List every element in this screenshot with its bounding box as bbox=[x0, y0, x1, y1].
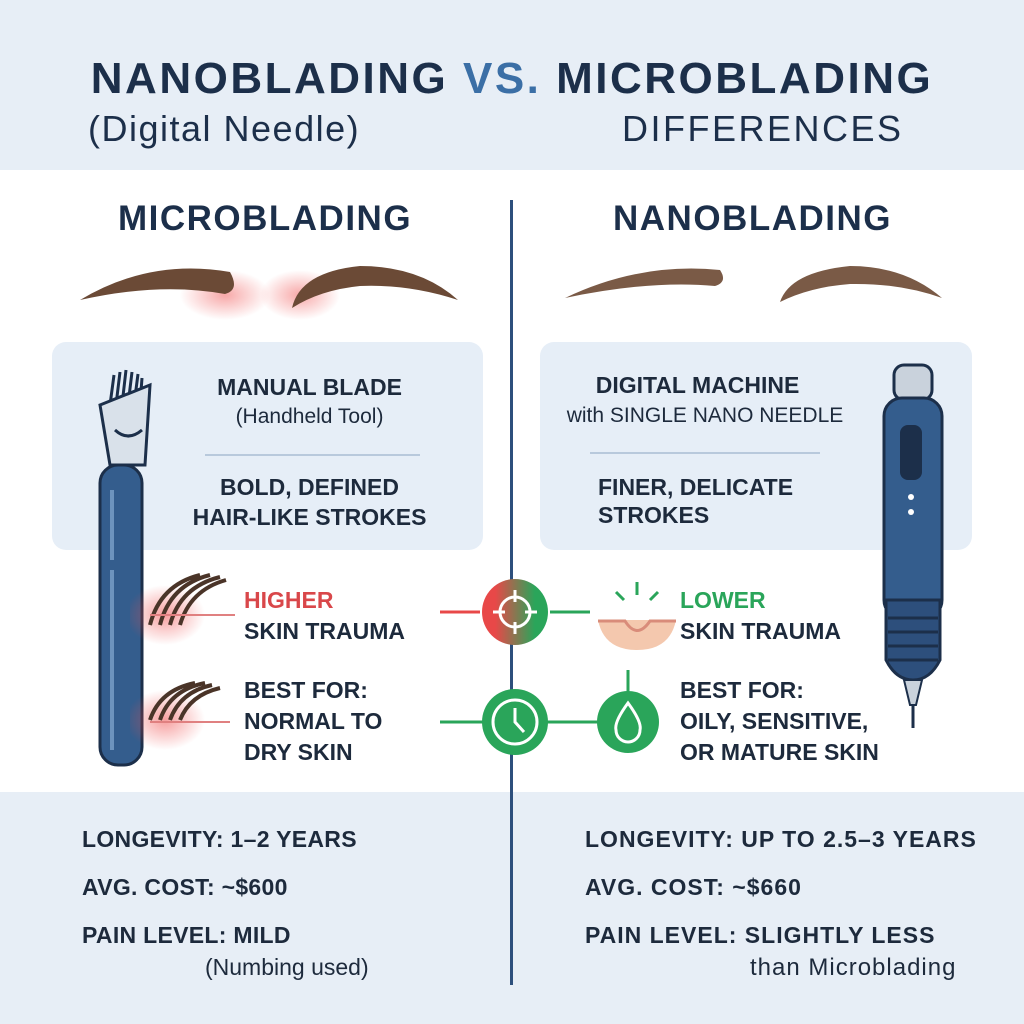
text: lower skin trauma: SKIN TRAUMA bbox=[680, 618, 841, 644]
icon: hair strokes with redness bbox=[130, 573, 235, 748]
footer: nanoblading stats bbox=[585, 826, 977, 948]
footer: microblading stats: LONGEVITY: 1–2 YEARS bbox=[82, 826, 357, 852]
panel: microblading tool box: HAIR-LIKE STROKES bbox=[193, 504, 426, 530]
panel: microblading tool box: (Handheld Tool) bbox=[236, 405, 383, 428]
subtitle left: (Digital Needle) bbox=[88, 108, 360, 149]
text: best for normal: DRY SKIN bbox=[244, 739, 353, 765]
text: best for oily bbox=[680, 677, 879, 765]
text: higher skin trauma: HIGHER bbox=[244, 587, 333, 613]
text: higher skin trauma: SKIN TRAUMA bbox=[244, 618, 405, 644]
panel: nanoblading tool box: FINER, DELICATE bbox=[598, 474, 793, 500]
icon: manual blade bbox=[98, 370, 152, 766]
text: best for oily: BEST FOR: bbox=[680, 677, 804, 703]
text: best for oily: OR MATURE SKIN bbox=[680, 739, 879, 765]
title: NANOBLADING VS. MICROBLADING bbox=[91, 54, 933, 103]
header band bbox=[0, 0, 1024, 170]
text: than Microblading bbox=[750, 954, 956, 981]
footer: microblading stats bbox=[82, 826, 357, 948]
heading: nanoblading: NANOBLADING bbox=[613, 199, 892, 238]
text: lower skin trauma bbox=[680, 587, 841, 644]
text: higher skin trauma bbox=[244, 587, 405, 644]
panel: microblading tool box: BOLD, DEFINED bbox=[220, 474, 399, 500]
text: best for oily: OILY, SENSITIVE, bbox=[680, 708, 868, 734]
panel: microblading tool box: MANUAL BLADE bbox=[217, 374, 402, 400]
text: lower skin trauma: LOWER bbox=[680, 587, 766, 613]
center divider bbox=[510, 200, 513, 985]
center icons bbox=[440, 579, 676, 755]
panel: microblading tool box bbox=[52, 342, 483, 550]
heading: microblading: MICROBLADING bbox=[118, 199, 412, 238]
subtitle right: DIFFERENCES bbox=[622, 108, 904, 149]
text: best for normal: NORMAL TO bbox=[244, 708, 382, 734]
footer: nanoblading stats: LONGEVITY: UP TO 2.5–3 YEARS bbox=[585, 826, 977, 852]
footer: nanoblading stats: AVG. COST: ~$660 bbox=[585, 874, 802, 900]
footer: microblading stats: AVG. COST: ~$600 bbox=[82, 874, 288, 900]
panel: nanoblading tool box: DIGITAL MACHINE bbox=[596, 372, 799, 398]
text: (Numbing used) bbox=[205, 954, 369, 980]
panel: nanoblading tool box: with SINGLE NANO NEEDLE bbox=[567, 404, 843, 427]
text: best for normal bbox=[244, 677, 382, 765]
panel: nanoblading tool box bbox=[540, 342, 972, 550]
text: best for normal: BEST FOR: bbox=[244, 677, 368, 703]
icon: digital pen bbox=[882, 364, 944, 728]
footer: microblading stats: PAIN LEVEL: MILD bbox=[82, 922, 291, 948]
footer: nanoblading stats: PAIN LEVEL: SLIGHTLY LESS bbox=[585, 922, 935, 948]
panel: nanoblading tool box: STROKES bbox=[598, 502, 709, 528]
footer band bbox=[0, 792, 1024, 1024]
eyebrows bbox=[80, 266, 942, 318]
